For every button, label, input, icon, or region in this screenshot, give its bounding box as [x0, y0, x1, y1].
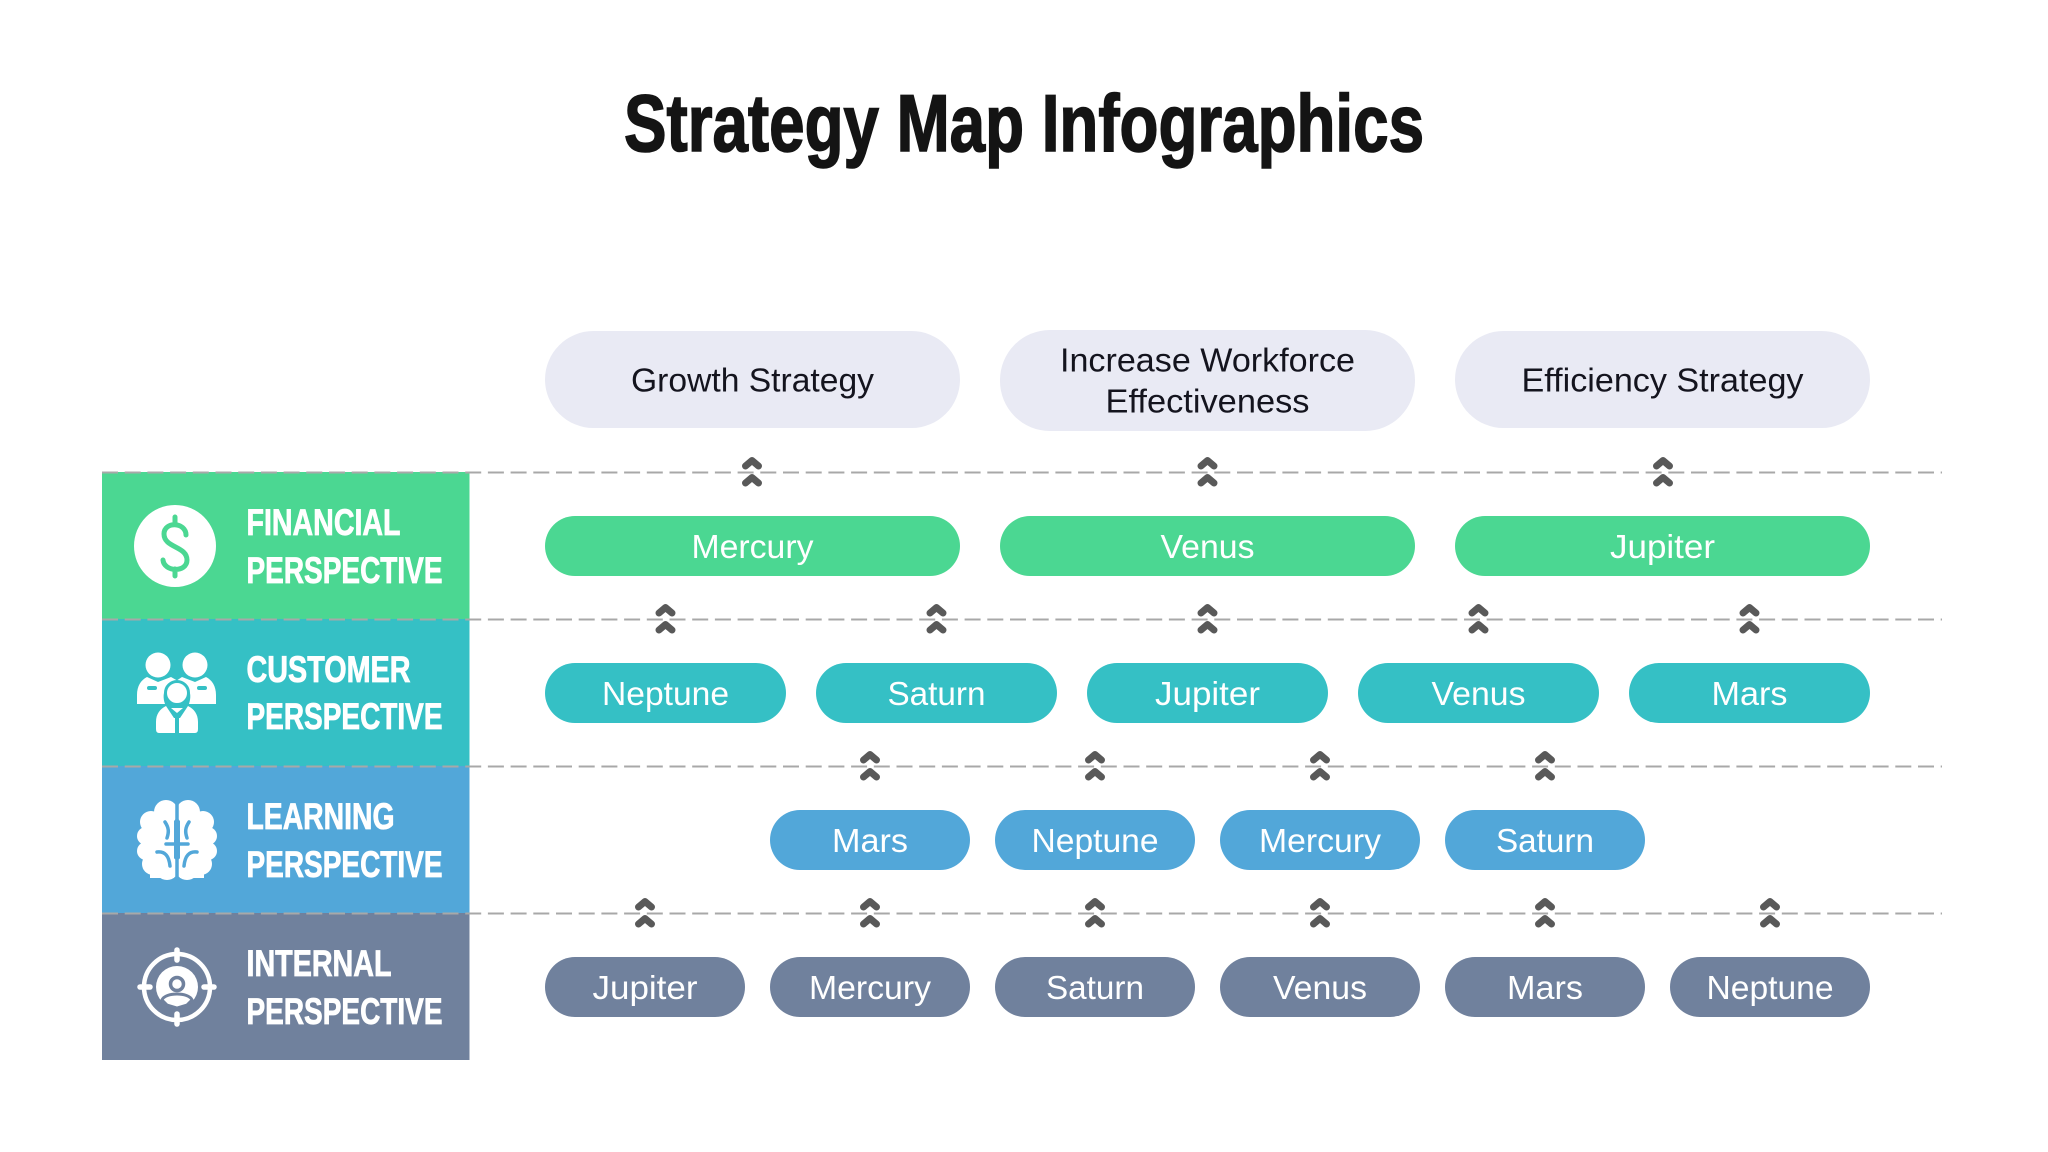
- label: internal perspective: PERSPECTIVE: [246, 991, 442, 1032]
- pill: venus: [1000, 516, 1415, 576]
- label: financial perspective: FINANCIAL: [246, 502, 400, 543]
- strategy pill: efficiency: Efficiency Strategy: [1522, 362, 1804, 398]
- pill: saturn: [816, 663, 1057, 723]
- label: internal perspective: [246, 943, 442, 1032]
- pill: jupiter: [545, 957, 745, 1017]
- arrows: internal to learning: [638, 902, 1776, 924]
- learning row pills: [770, 810, 1645, 870]
- pill: jupiter: [1455, 516, 1870, 576]
- strategy pill: efficiency: [1455, 331, 1870, 428]
- pill: jupiter: [1087, 663, 1328, 723]
- pill: venus: [1358, 663, 1599, 723]
- pill: venus: Venus: [1160, 528, 1254, 565]
- pill: mars: [770, 810, 970, 870]
- pill: neptune: Neptune: [1706, 969, 1834, 1006]
- pill: venus: Venus: [1432, 675, 1526, 712]
- pill: mars: Mars: [1507, 969, 1583, 1006]
- pill: mercury: Mercury: [809, 969, 931, 1006]
- pill: mercury: [770, 957, 970, 1017]
- pill: jupiter: Jupiter: [592, 969, 698, 1006]
- label: customer perspective: PERSPECTIVE: [246, 696, 442, 737]
- pill: neptune: [545, 663, 786, 723]
- pill: mars: Mars: [1712, 675, 1788, 712]
- pill: venus: Venus: [1273, 969, 1367, 1006]
- financial row pills: [545, 516, 1870, 576]
- strategy pill: workforce: Increase Workforce: [1060, 342, 1355, 378]
- label: learning perspective: PERSPECTIVE: [246, 844, 442, 885]
- panel: learning perspective: [102, 766, 470, 913]
- icon: target person: [140, 950, 214, 1024]
- label: financial perspective: [246, 502, 442, 591]
- panel: financial perspective: [102, 472, 470, 619]
- pill: saturn: Saturn: [1496, 822, 1594, 859]
- arrows: financial to strategy: [746, 460, 1670, 483]
- strategy pill: workforce: Effectiveness: [1106, 382, 1310, 420]
- pill: neptune: Neptune: [602, 675, 729, 712]
- icon: dollar coin: [134, 505, 216, 587]
- strategy pill: growth: Growth Strategy: [631, 362, 875, 398]
- pill: neptune: Neptune: [1032, 822, 1158, 859]
- pill: mercury: [1220, 810, 1420, 870]
- label: learning perspective: [246, 796, 442, 885]
- pill: jupiter: Jupiter: [1155, 675, 1260, 712]
- label: customer perspective: CUSTOMER: [246, 649, 410, 690]
- pill: saturn: [1445, 810, 1645, 870]
- pill: mars: [1629, 663, 1870, 723]
- pill: mars: Mars: [832, 822, 908, 859]
- pill: neptune: [1670, 957, 1870, 1017]
- pill: venus: [1220, 957, 1420, 1017]
- pill: mars: [1445, 957, 1645, 1017]
- arrows: customer to financial: [659, 608, 1756, 630]
- icon: brain: [137, 800, 217, 880]
- label: learning perspective: LEARNING: [246, 796, 394, 837]
- pill: saturn: [995, 957, 1195, 1017]
- strategy pill: workforce: [1000, 330, 1415, 431]
- pill: mercury: Mercury: [1259, 822, 1381, 859]
- pill: saturn: Saturn: [1046, 969, 1144, 1006]
- pill: jupiter: Jupiter: [1610, 528, 1715, 565]
- label: financial perspective: PERSPECTIVE: [246, 550, 442, 591]
- panel: customer perspective: [102, 619, 470, 766]
- icon: customers group: [137, 652, 216, 733]
- arrows: learning to customer: [864, 754, 1552, 777]
- pill: mercury: [545, 516, 960, 576]
- pill: mercury: Mercury: [692, 528, 814, 565]
- title: Strategy Map Infographics: [624, 79, 1424, 169]
- pill: saturn: Saturn: [888, 675, 986, 712]
- internal row pills: [545, 957, 1870, 1017]
- strategy pill: growth: [545, 331, 960, 428]
- panel: internal perspective: [102, 913, 470, 1060]
- pill: neptune: [995, 810, 1195, 870]
- label: customer perspective: [246, 649, 442, 737]
- customer row pills: [545, 663, 1870, 723]
- label: internal perspective: INTERNAL: [246, 943, 392, 984]
